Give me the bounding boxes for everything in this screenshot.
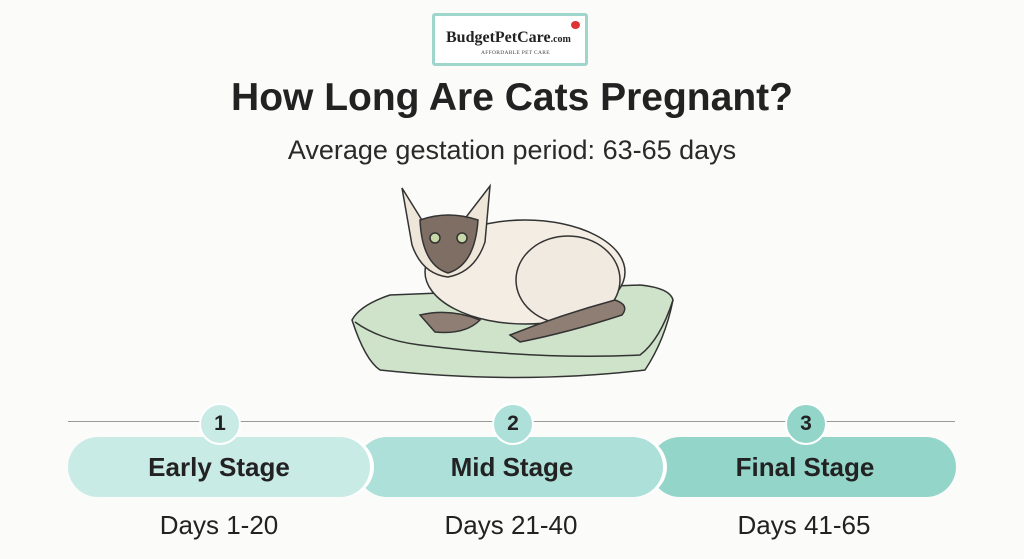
timeline line xyxy=(68,421,955,422)
stage 1 label: Early Stage xyxy=(148,452,290,482)
step circle 2: 2 xyxy=(507,412,519,435)
step circle 3 xyxy=(785,403,827,445)
days 1: Days 1-20 xyxy=(160,510,278,540)
title: How Long Are Cats Pregnant? xyxy=(231,76,793,119)
logo paw icon xyxy=(571,21,580,29)
step circle 1: 1 xyxy=(214,412,226,435)
stage 1: Early Stage xyxy=(68,437,370,497)
step circle 3: 3 xyxy=(800,412,812,435)
logo tagline: AFFORDABLE PET CARE xyxy=(481,50,550,56)
subtitle: Average gestation period: 63-65 days xyxy=(288,135,736,165)
step circle 1 xyxy=(199,403,241,445)
days 2: Days 21-40 xyxy=(445,510,577,540)
stage 3 label: Final Stage xyxy=(736,452,874,482)
stage 2: Mid Stage xyxy=(357,437,663,497)
stage 2 label: Mid Stage xyxy=(451,452,573,482)
logo text: BudgetPetCare.com xyxy=(446,29,571,46)
days 3: Days 41-65 xyxy=(738,510,870,540)
step circle 2 xyxy=(492,403,534,445)
illustration: cat on cushion xyxy=(351,184,674,378)
stage 3: Final Stage xyxy=(650,437,956,497)
logo xyxy=(432,13,588,66)
